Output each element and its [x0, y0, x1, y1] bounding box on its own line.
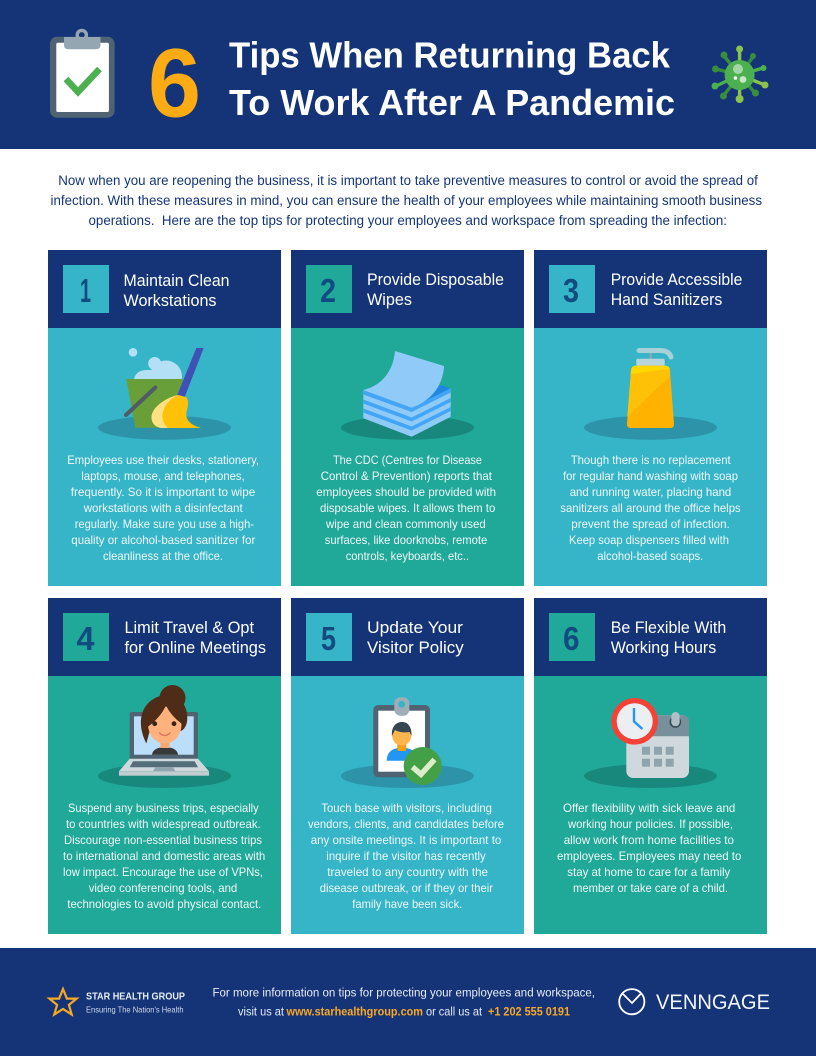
contact text [212, 986, 595, 1019]
icon: star logo [49, 989, 77, 1014]
title: Tips When Returning Back [229, 35, 671, 76]
footer band [0, 948, 816, 1056]
body text 6: member or take care of a child. [573, 881, 728, 895]
body text 4: Suspend any business trips, especially [68, 801, 259, 815]
body text 1: frequently. So it is important to wipe [71, 485, 256, 499]
intro paragraph: operations. Here are the top tips for protecting your employees and workspace from spreading the infection: [88, 213, 727, 228]
body text 2: Control & Prevention) reports that [321, 469, 493, 483]
number 6: 6 [563, 620, 580, 657]
title: To Work After A Pandemic [229, 82, 675, 123]
body text 5: traveled to any country with the [327, 865, 488, 879]
contact text: For more information on tips for protecting your employees and workspace, [212, 986, 595, 1000]
body text 5: Touch base with visitors, including [321, 801, 492, 815]
heading 1: Workstations [124, 291, 216, 310]
body text 5: inquire if the visitor has recently [326, 849, 486, 863]
number 5: 5 [321, 620, 336, 657]
heading 3 [611, 270, 742, 309]
body text 6: allow work from home facilities to [564, 833, 734, 847]
body text 6 [557, 801, 742, 895]
icon: woman on laptop [98, 685, 231, 788]
body text 4: to international and domestic areas with [63, 849, 265, 863]
intro paragraph: Now when you are reopening the business, it is important to take preventive measures to control or avoid the spread of [58, 173, 758, 188]
heading 6 [611, 618, 726, 657]
body text 5: any onsite meetings. It is important to [311, 833, 502, 847]
body text 3 [560, 453, 741, 563]
intro paragraph [50, 173, 762, 228]
venngage logo [619, 989, 770, 1014]
number 4: 4 [76, 620, 95, 657]
venngage logo: VENNGAGE [656, 991, 770, 1014]
body text 5: vendors, clients, and candidates before [308, 817, 504, 831]
title [229, 35, 675, 123]
body text 2: employees should be provided with [316, 485, 496, 499]
panel: tip 6 be flexible with working hours [534, 598, 767, 934]
body text 4: to countries with widespread outbreak. [66, 817, 261, 831]
body text 4: video conferencing tools, and [89, 881, 237, 895]
body text 3: for regular hand washing with soap [563, 469, 738, 483]
intro paragraph: infection. With these measures in mind, you can ensure the health of your employees while maintaining smooth business [50, 193, 762, 208]
body text 6: employees. Employees may need to [557, 849, 742, 863]
body text 3: Keep soap dispensers filled with [569, 533, 729, 547]
icon: stack of wipes [341, 351, 474, 440]
panel: tip 2 provide disposable wipes [291, 250, 524, 586]
body text 2 [316, 453, 496, 563]
body text 4: low impact. Encourage the use of VPNs, [63, 865, 263, 879]
company name and tagline: STAR HEALTH GROUP [86, 992, 185, 1002]
contact text: visit us at [238, 1005, 284, 1019]
icon: bucket and broom [98, 348, 231, 440]
company name and tagline [86, 992, 185, 1015]
number 3: 3 [563, 272, 579, 309]
body text 1: quality or alcohol-based sanitizer for [71, 533, 255, 547]
number 1: 1 [80, 272, 91, 309]
heading 2: Provide Disposable [367, 270, 504, 289]
body text 6: working hour policies. If possible, [567, 817, 733, 831]
heading 5 [367, 618, 464, 657]
body text 2: The CDC (Centres for Disease [333, 453, 482, 467]
panel: tip 3 provide accessible hand sanitizers [534, 250, 767, 586]
body text 1 [67, 453, 259, 563]
body text 4: technologies to avoid physical contact. [67, 897, 261, 911]
contact text: or call us at [426, 1005, 482, 1019]
body text 3: sanitizers all around the office helps [560, 501, 741, 515]
contact text: +1 202 555 0191 [488, 1005, 570, 1019]
contact text: www.starhealthgroup.com [286, 1005, 423, 1019]
body text 6: Offer flexibility with sick leave and [563, 801, 735, 815]
body text 2: surfaces, like doorknobs, remote [325, 533, 488, 547]
body text 3: prevent the spread of infection. [571, 517, 730, 531]
heading 6: Working Hours [611, 638, 716, 657]
big number 6: 6 [148, 28, 201, 138]
body text 2: disposable wipes. It allows them to [320, 501, 496, 515]
body text 1: laptops, mouse, and telephones, [81, 469, 245, 483]
heading 2 [367, 270, 504, 309]
heading 1 [124, 271, 230, 310]
header banner [0, 0, 816, 149]
icon: clipboard with check [50, 30, 115, 118]
heading 6: Be Flexible With [611, 618, 726, 637]
number 2: 2 [320, 272, 336, 309]
body text 6: stay at home to care for a family [567, 865, 730, 879]
icon: sanitizer bottle [584, 350, 717, 440]
panel: tip 1 maintain clean workstations [48, 250, 281, 586]
heading 4: for Online Meetings [124, 638, 266, 657]
icon: virus [712, 46, 768, 103]
body text 1: Employees use their desks, stationery, [67, 453, 259, 467]
body text 3: and running water, placing hand [570, 485, 731, 499]
body text 3: Though there is no replacement [571, 453, 731, 467]
body text 5: disease outbreak, or if they or their [320, 881, 493, 895]
company name and tagline: Ensuring The Nation's Health [86, 1005, 184, 1015]
body text 2: wipe and clean commonly used [325, 517, 486, 531]
body text 3: alcohol-based soaps. [597, 549, 703, 563]
body text 2: controls, keyboards, etc.. [346, 549, 469, 563]
icon: calendar and clock [584, 698, 717, 788]
heading 2: Wipes [367, 290, 412, 309]
icon: visitor badge with check [341, 697, 474, 788]
heading 4 [124, 618, 266, 657]
panel: tip 5 update your visitor policy [291, 598, 524, 934]
heading 5: Visitor Policy [367, 638, 464, 657]
body text 1: workstations with a disinfectant [83, 501, 243, 515]
panel: tip 4 limit travel and opt for online meetings [48, 598, 281, 934]
heading 1: Maintain Clean [124, 271, 230, 290]
heading 5: Update Your [367, 618, 463, 637]
heading 3: Provide Accessible [611, 270, 742, 289]
heading 3: Hand Sanitizers [611, 290, 722, 309]
body text 5 [308, 801, 504, 911]
body text 4: Discourage non-essential business trips [64, 833, 262, 847]
body text 1: regularly. Make sure you use a high- [75, 517, 254, 531]
body text 4 [63, 801, 265, 911]
heading 4: Limit Travel & Opt [124, 618, 254, 637]
body text 1: cleanliness at the office. [103, 549, 223, 563]
body text 5: family have been sick. [352, 897, 462, 911]
